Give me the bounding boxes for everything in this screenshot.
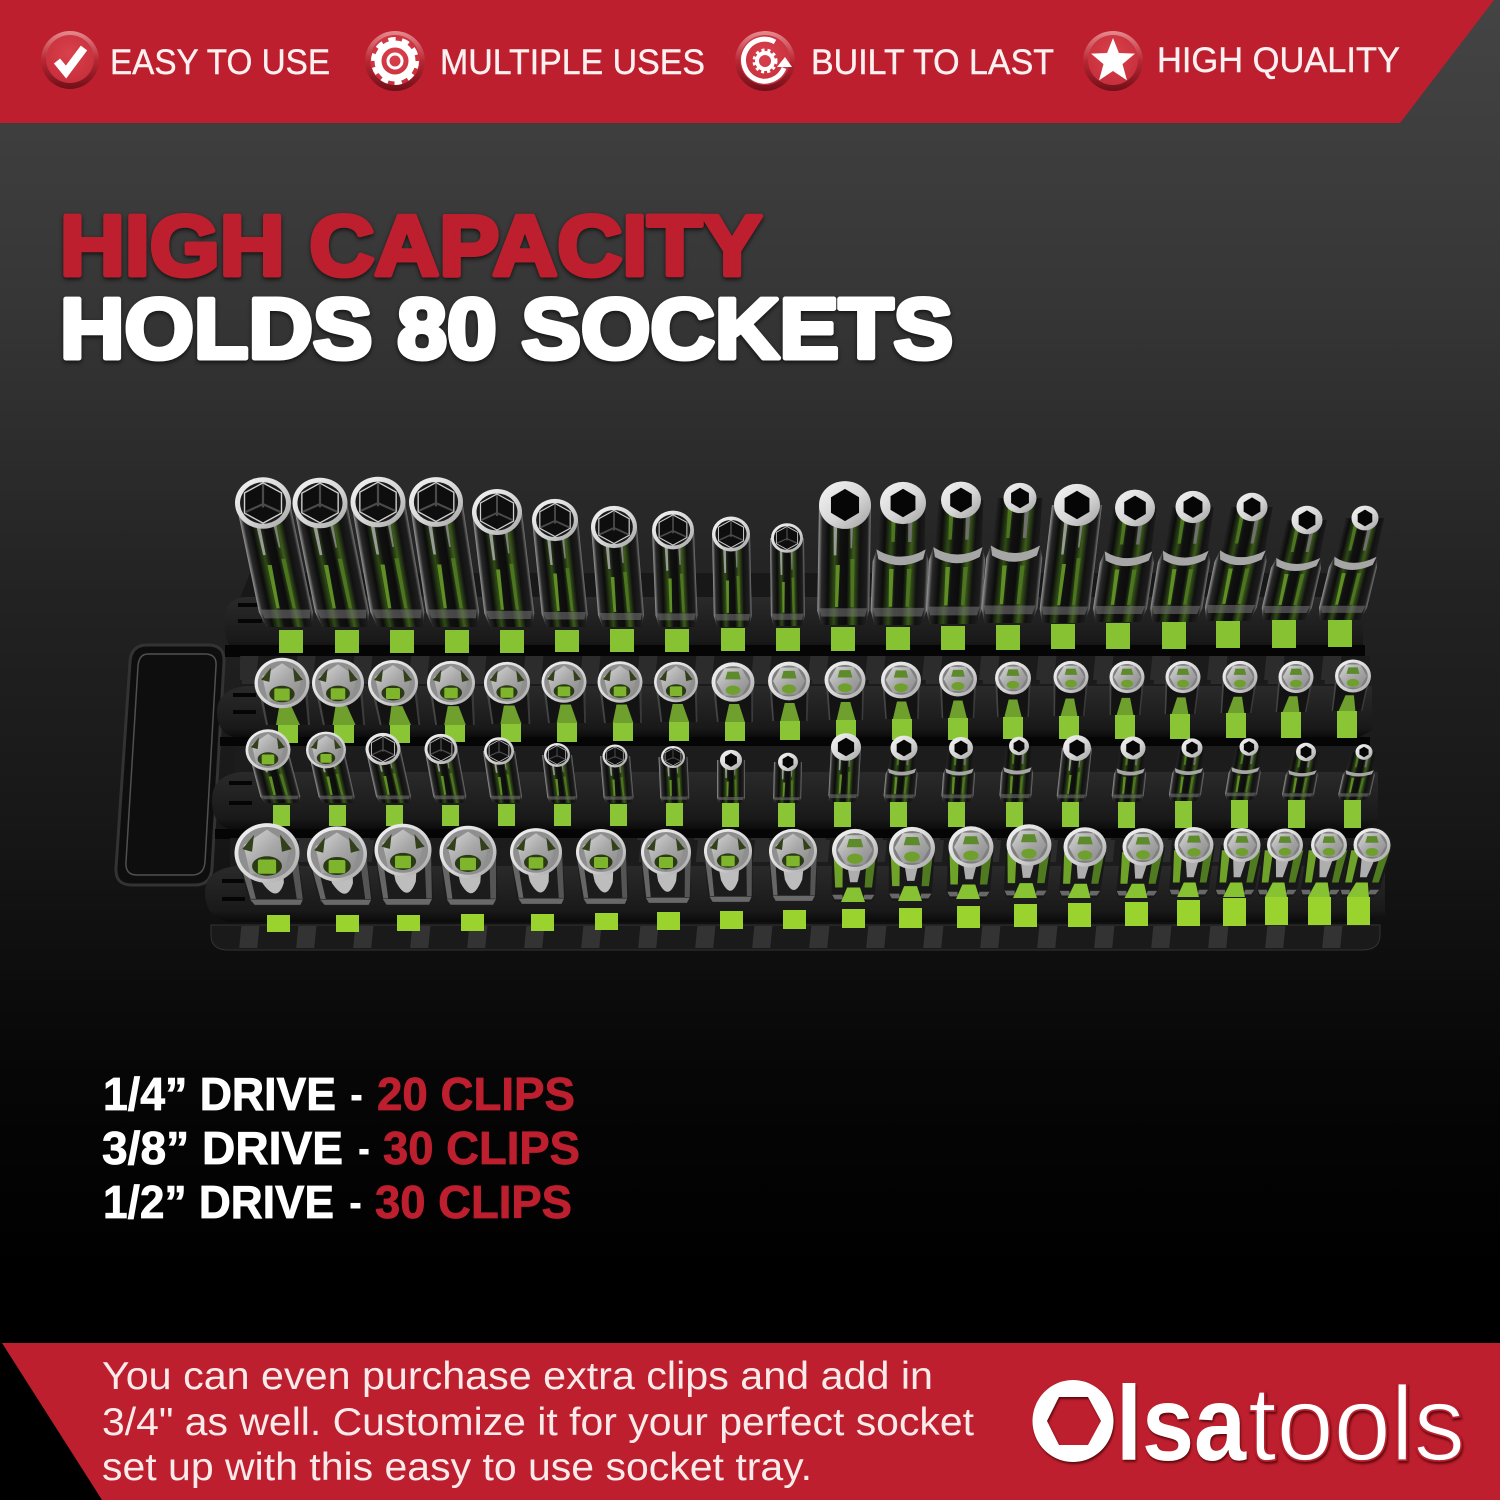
wordmark: tools [1248,1365,1465,1483]
badge: built to last [735,31,1054,91]
line: 3/8 drive [102,1122,580,1174]
badge: easy to use [41,31,330,89]
row two clips [278,708,1357,743]
line: 1/4 drive: 1/4” DRIVE [103,1068,336,1120]
description text: 3/4" as well. Customize it for your perfect socket [102,1401,974,1444]
line: 1/2 drive: 30 CLIPS [375,1176,572,1228]
tray: row three back plate [212,746,1378,839]
line: 1/2 drive [103,1176,572,1228]
tray: row one back plate [224,573,1365,657]
product: socket tray organiser [116,477,1393,950]
heading: holds 80 sockets: HOLDS 80 SOCKETS [60,282,953,377]
description text: You can even purchase extra clips and add in [102,1355,933,1398]
row three sockets: 1/4 inch [246,729,1380,803]
top banner: feature badges [0,0,1494,123]
capacity list [102,1068,580,1228]
logo: Olsatools [1033,1365,1465,1483]
label: high quality: HIGH QUALITY [1157,41,1400,80]
line: 1/4 drive: 20 CLIPS [377,1068,575,1120]
description text [102,1355,974,1489]
logo mark: hex nut O [1033,1380,1114,1462]
tray: row two back plate [217,656,1372,746]
row two sockets: shallow 3/8 inch [254,658,1371,725]
bottom banner [2,1343,1500,1500]
title [60,199,953,377]
wordmark [1116,1365,1465,1483]
icon: gear [365,31,425,91]
line: 1/2 drive: 1/2” DRIVE [103,1176,334,1228]
icon: cycle gear [735,31,795,91]
label: easy to use: EASY TO USE [110,43,330,82]
badge: multiple uses [365,31,705,91]
line: 3/8 drive: 3/8” DRIVE [102,1122,343,1174]
line: 1/4 drive: - [350,1068,363,1120]
icon: check mark [41,31,99,89]
badge: high quality [1083,31,1400,91]
row four sockets: 1/2 inch [234,823,1393,907]
line: 1/4 drive [103,1068,575,1120]
handle loop [116,645,224,885]
label: built to last: BUILT TO LAST [811,43,1054,82]
label: multiple uses: MULTIPLE USES [440,43,705,82]
heading: high capacity: HIGH CAPACITY [60,199,762,294]
tray: row four back plate [205,838,1385,922]
row one clips [279,618,1352,653]
description text: set up with this easy to use socket tray. [102,1446,812,1489]
wordmark: lsa [1116,1365,1247,1483]
tray: bottom reflection [211,925,1380,950]
icon: star [1083,31,1143,91]
line: 3/8 drive: 30 CLIPS [383,1122,580,1174]
line: 1/2 drive: - [349,1176,362,1228]
row one sockets: deep 1/4 inch [235,477,1389,627]
row four clips [267,895,1370,932]
line: 3/8 drive: - [358,1122,370,1174]
row three clips [273,795,1361,828]
